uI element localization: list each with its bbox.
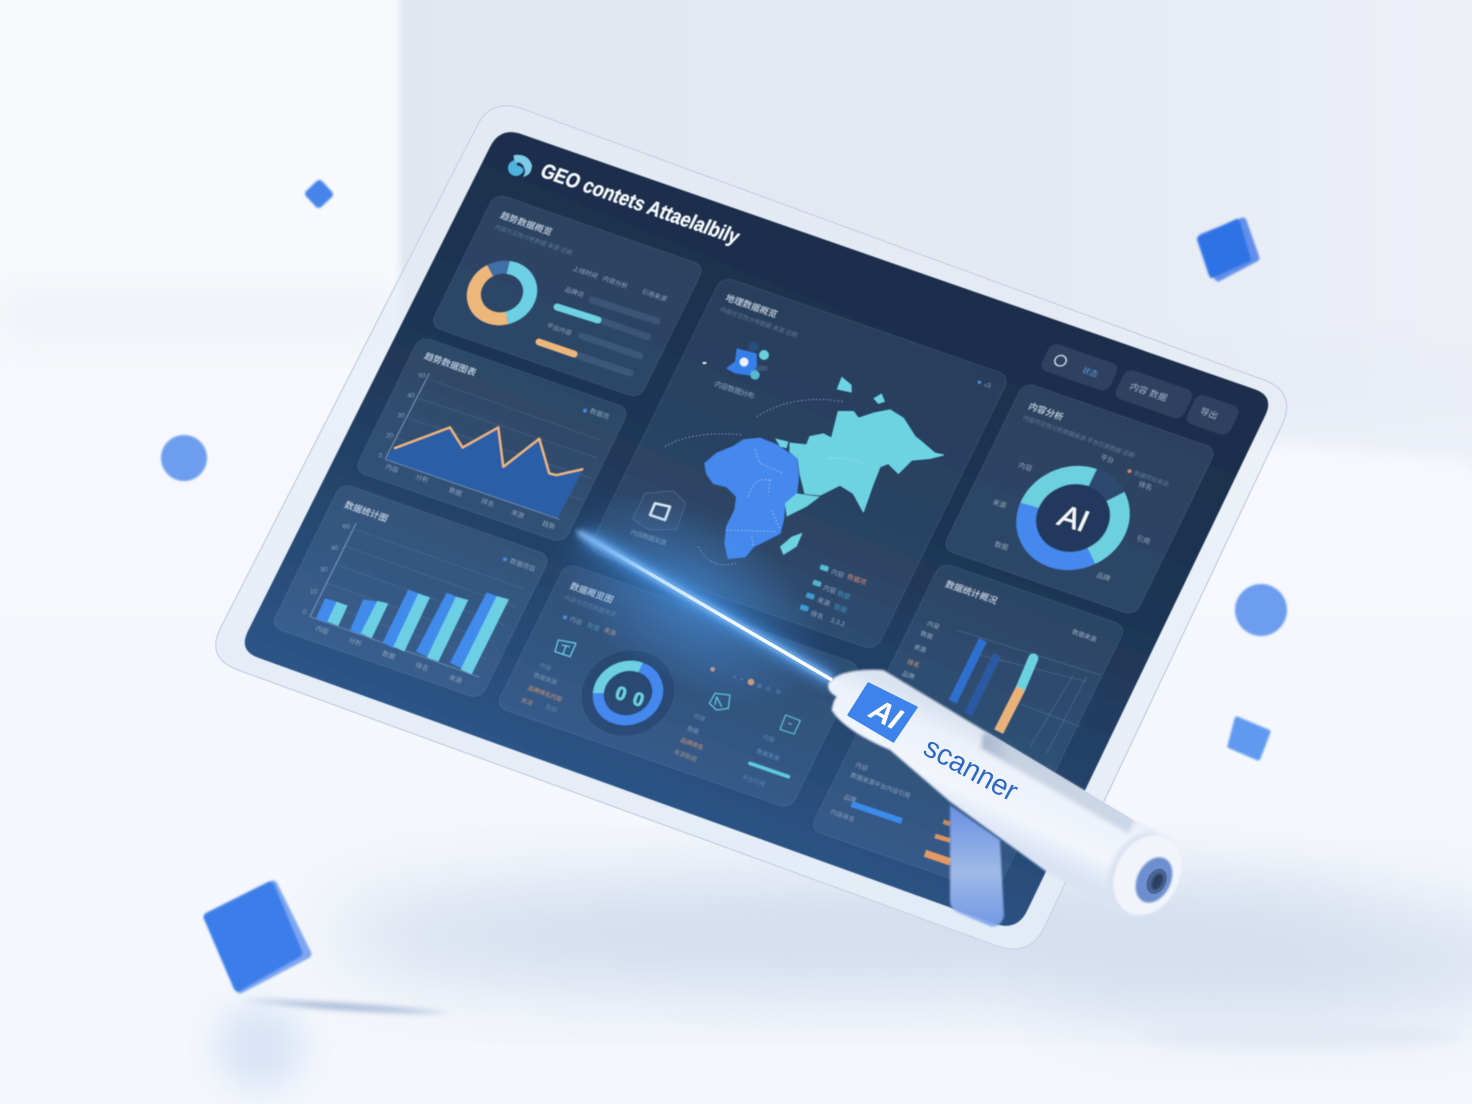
line chart: 来源 [510,507,526,521]
line chart: 数据项 [589,406,611,421]
floating cube bottom-left [208,885,307,989]
mini column chart: 内容 [926,618,942,631]
progress labels: 上线时间 [571,264,600,280]
line chart: 趋势 [541,518,557,532]
map legend [799,564,868,629]
bar chart: 40 [331,545,339,552]
bar chart: 数据项目 [509,556,537,574]
left metric text: 品牌排名内容 [527,684,563,703]
button: export: 导出 [1198,405,1220,421]
map key marker [978,381,991,389]
button: filter: 内容 数据 [1128,381,1169,403]
AI badge [848,683,917,742]
donut callouts [991,452,1153,583]
donut chart: composition [450,247,554,339]
map legend: 排名 [809,608,825,621]
metric legend dots: 内容 [569,614,584,627]
scan beam [518,451,862,749]
left metric text: 来源 [520,696,534,708]
right metric text and bar [741,733,788,788]
metric legend dots: 数据 [586,620,602,633]
AI badge: AI [863,692,908,737]
panel: line chart [354,336,630,544]
panel: world map [587,276,1010,651]
donut centre label: AI [1053,500,1094,538]
right metric text and bar: 平台引用 [741,773,766,788]
button: chat: 状态 [1081,365,1100,379]
floating diamond top-left [303,178,335,210]
scanner rear cap [1095,820,1195,927]
panel subheading: 内容可见性分布数据 来源 近期 [718,305,799,339]
line chart: 40 [407,392,415,399]
bar chart: 内容 [314,623,330,637]
map legend: 3.3.2 [829,617,846,629]
donut callouts: 品牌 [1095,570,1111,583]
panel heading: 内容分析 [1027,400,1066,422]
progress labels: 内容分析 [601,274,630,290]
line chart: 分析 [414,472,430,485]
bar chart: 0 [303,609,307,616]
panel: gauge and metrics [496,563,861,809]
icon caption: 内容数据分布 [713,379,756,401]
panel: top-right buttons [1039,342,1241,437]
left metric text [520,661,563,714]
floating square right [1230,719,1268,758]
icon: blue satellite [703,342,769,380]
progress labels: 引用来源 [640,287,669,303]
scanner and clip [828,670,1195,927]
scanner top strip [982,733,1137,833]
title: GEO contets Attaelalbily [537,160,744,249]
bottom-right table rows: 品牌 [843,792,858,805]
scanner clip [950,805,1004,926]
line chart: 0 [379,452,383,459]
donut callouts: 排名 [1137,479,1153,492]
scanner label: scanner [918,730,1024,808]
bar chart: 10 [310,588,318,595]
donut callouts: 内容 [1017,460,1033,473]
right metric text and bar: 内容 [762,733,776,744]
middle metric text [673,712,707,763]
panel heading: 地理数据概览 [724,292,780,320]
icon caption: 内容数据来源 [629,527,668,548]
donut callouts: 引用 [1135,533,1151,546]
scanner body [828,670,1180,917]
mini column chart [901,618,1100,753]
bottom-right table rows: 内容排名 [829,807,856,824]
icon: document in hexagon [633,491,686,530]
left metric text: 数据来源 [533,671,558,687]
map legend: 数据 [833,602,849,615]
bar chart [303,523,537,686]
bar chart: 分析 [348,635,364,648]
line chart: 排名 [480,496,496,509]
bar chart: 来源 [448,672,464,686]
map legend: 数据 [836,588,852,602]
tablet glass frame [216,106,1287,949]
bar chart: 数据 [381,648,397,662]
mini column chart: 来源 [913,642,928,655]
line chart: 内容 [384,462,400,475]
decorative status dots [710,667,781,694]
map legend: 来源 [816,595,832,608]
bar chart: 60 [343,523,350,530]
panel: bottom-right table and bars [810,562,1126,894]
middle metric text: 内容 [693,712,707,723]
map legend: 内容 [830,567,846,580]
bar chart: 30 [320,567,328,574]
middle metric text: 来源数据 [673,748,698,763]
icon: cube [555,640,576,657]
floating circle left [161,435,207,481]
button: filter [1113,368,1195,420]
middle metric text: 品牌排名 [679,736,705,752]
region: blue landmass [705,438,798,558]
map route lines [665,399,863,565]
donut callouts: 平台 [1099,452,1115,465]
tablet screen [245,132,1268,926]
panel: donut summary [430,193,705,399]
button: export [1184,393,1241,437]
line chart: 50 [418,372,426,379]
mini column chart: 排名 [906,657,921,670]
panel heading: 数据概览图 [568,580,616,605]
metric legend dots: 来源 [603,625,618,638]
map legend: 内容 [822,583,838,596]
bottom-right table rows [829,760,951,862]
panel heading: 趋势数据图表 [423,350,478,378]
legend note: 数据项目来源 [1133,469,1170,488]
map of regions [629,342,991,629]
icon: chart tile [709,693,730,710]
bar chart: 排名 [414,660,430,673]
left metric text: 数据 [544,703,558,714]
panel: bar chart [271,483,551,699]
line chart: 20 [386,433,394,440]
panel subheading: 内容可见性分析数据来源 平台引用数据 近期 [1021,414,1136,460]
panel: AI donut [942,382,1217,616]
right metric text and bar: 数据来源 [755,747,781,763]
panel heading: 数据统计概况 [944,578,1000,606]
progress rows [539,300,657,373]
panel subheading: 内容可见性分析数据 来源 近期 [493,223,574,257]
progress labels: 平台内容 [545,321,574,337]
region: cyan islands [775,377,885,555]
middle metric text: 数据 [686,724,700,736]
donut chart: AI share [985,440,1161,596]
panel heading: 数据统计图 [343,499,390,524]
floating cube top-right [1200,221,1256,278]
icon: device tile [780,715,800,734]
metric legend dots [563,614,618,638]
region: cyan landmass [790,410,943,512]
line chart [379,372,611,532]
map legend: 数据项 [846,572,868,587]
dashboard contents [271,155,1241,894]
mini column chart: 数据 [919,628,935,641]
map key marker: <3 [984,383,991,389]
gauge ring [566,638,690,748]
logo icon [508,155,532,177]
gauge panel details [520,614,800,788]
gauge value: 00 [612,683,647,712]
left metric text: 内容 [539,661,553,673]
panel subheading: 内容可见性数据来源 [563,594,618,619]
progress labels: 品牌词 [563,285,586,299]
bottom-right table rows: 内容 [854,760,870,773]
mini column chart: 数据来源 [1071,627,1098,644]
donut callouts: 来源 [991,497,1007,510]
floating circle right [1235,584,1287,636]
line chart: 数据 [448,485,464,498]
donut callouts: 数据 [993,539,1009,552]
legend note [1126,467,1170,488]
button: chat [1039,342,1120,393]
progress labels [545,264,669,337]
line chart: 30 [397,413,405,420]
mini column chart: 品牌 [901,668,917,681]
bottom-right table rows: 数据来源平台内容引用 [849,770,912,800]
panel heading: 趋势数据概览 [499,210,554,237]
